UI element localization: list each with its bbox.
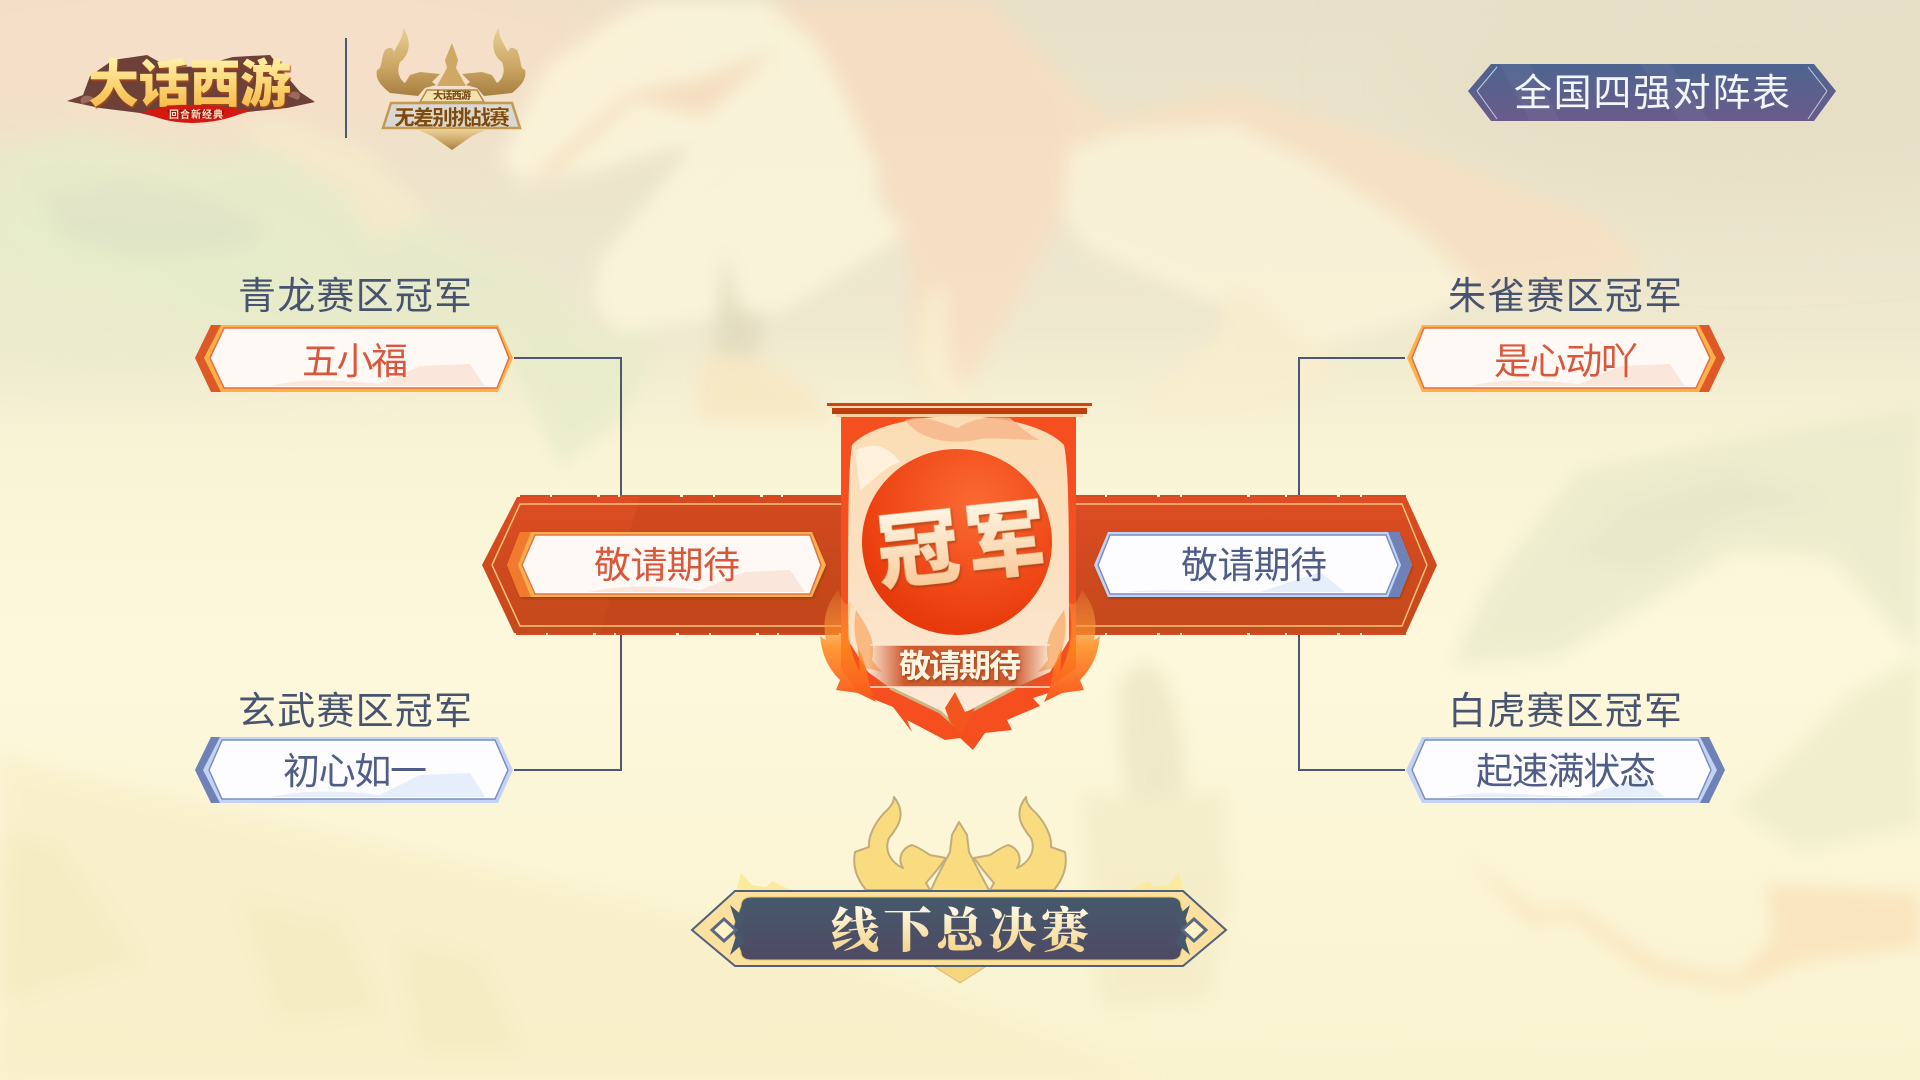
logo: tournament emblem: 无差别挑战赛: [394, 106, 510, 130]
plate: right semifinal slot: [1094, 532, 1412, 597]
banner gold V trim: [890, 688, 1015, 727]
side flames: [820, 590, 1100, 702]
champion title: 冠军: [873, 492, 1051, 601]
top-right title badge: [1468, 64, 1836, 121]
plate: 初心如一: 初心如一: [283, 751, 427, 792]
plate: 初心如一: [195, 737, 513, 803]
roof terrain bottom left: [0, 745, 1160, 1080]
divider between logos: [345, 38, 347, 138]
plate: left semifinal slot: 敬请期待: [594, 545, 740, 586]
plate: 起速满状态: 起速满状态: [1476, 751, 1656, 792]
phoenix orange plumage: [764, 0, 1069, 400]
band: right red ribbon: [1060, 496, 1437, 634]
phoenix head and lower flames: [915, 280, 975, 404]
label: Xuanwu region champion: 玄武赛区冠军: [238, 691, 472, 733]
plate: 是心动吖: 是心动吖: [1494, 341, 1638, 382]
logo: Dahua Xiyou game logo: [67, 55, 315, 123]
plate: 起速满状态: [1406, 737, 1725, 803]
plate: 五小福: [195, 325, 513, 392]
phoenix left wing: [500, 0, 905, 333]
center band: semifinal slots: [482, 496, 1437, 634]
left-side dragon silhouette: [0, 130, 660, 470]
right-side dragon silhouette: [1450, 407, 1920, 666]
red tail swoosh: [1458, 849, 1920, 990]
logo: tournament emblem: [377, 28, 525, 150]
label: Zhuque region champion: 朱雀赛区冠军: [1448, 276, 1682, 318]
label: Qinglong region champion: 青龙赛区冠军: [238, 276, 472, 318]
connector lines: right bracket: [1299, 358, 1405, 770]
connector lines: left bracket: [514, 358, 621, 770]
yellow flames behind plaque: [735, 873, 1185, 895]
banner top bar: [827, 403, 1092, 417]
plate: 五小福: 五小福: [302, 341, 408, 382]
final emblem: gold phoenix crest: [854, 797, 1066, 983]
banner red cloth: [841, 414, 1076, 750]
plate: 是心动吖: [1407, 325, 1725, 392]
champion name strip: 敬请期待: [899, 648, 1021, 684]
warrior figure: [1119, 664, 1185, 860]
top-right title badge: 全国四强对阵表: [1514, 73, 1790, 115]
plate: left semifinal slot: [507, 532, 826, 597]
logo: tournament emblem: 大话西游: [433, 89, 471, 102]
final plaque: offline grand final: 线下总决赛: [831, 904, 1094, 958]
red sun circle: [862, 449, 1052, 635]
label: Baihu region champion: 白虎赛区冠军: [1448, 691, 1682, 733]
logo: Dahua Xiyou game logo: 大话西游: [88, 56, 291, 113]
final plaque: offline grand final: [692, 891, 1226, 966]
band: left red ribbon: [482, 496, 860, 634]
champion name strip: [868, 645, 1050, 687]
phoenix right wing: [1063, 123, 1480, 347]
logo: Dahua Xiyou game logo: 回合新经典: [169, 108, 223, 121]
banner bottom flame crest: [945, 692, 975, 735]
champion banner: [820, 403, 1100, 750]
banner cream panel: [848, 416, 1069, 727]
plate: right semifinal slot: 敬请期待: [1181, 545, 1327, 586]
